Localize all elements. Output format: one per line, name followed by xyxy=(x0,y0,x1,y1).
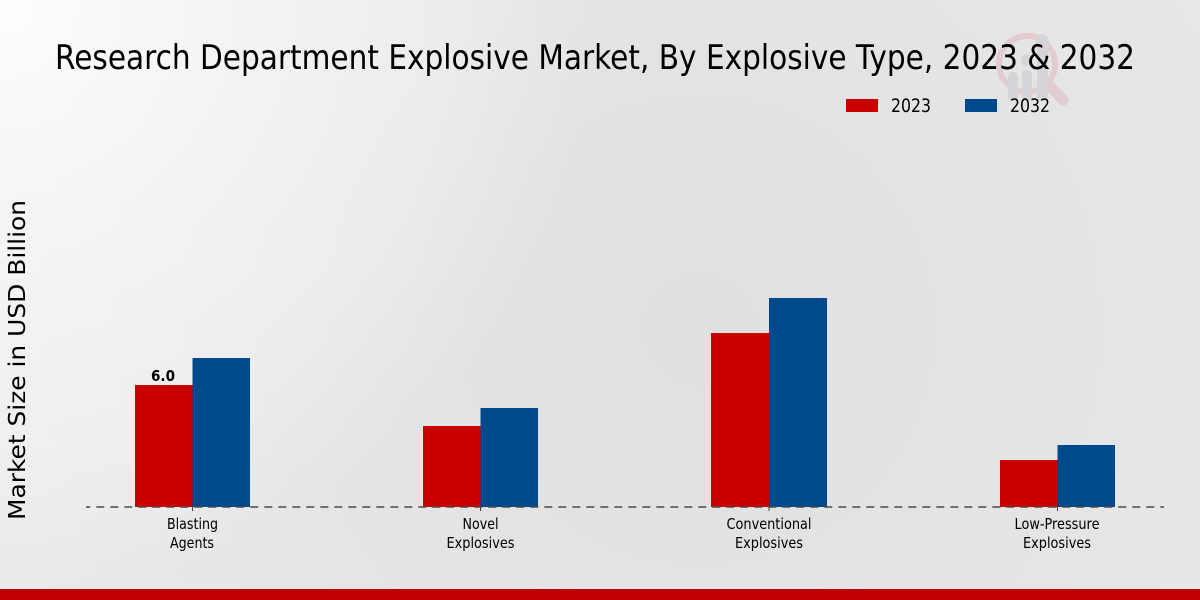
x-axis label: Conventional Explosives: Explosives xyxy=(735,534,803,552)
x-axis label: Novel Explosives: Novel xyxy=(462,515,498,533)
x-axis label: Novel Explosives: Explosives xyxy=(446,534,515,552)
bars: Low-Pressure Explosives xyxy=(1000,445,1115,507)
legend xyxy=(846,95,1050,117)
x-axis label: Blasting Agents: Agents xyxy=(170,534,214,552)
legend item: 2023 xyxy=(846,95,931,117)
x-axis label: Blasting Agents xyxy=(167,515,218,552)
legend item: 2023: 2023 xyxy=(891,95,931,117)
bar chart xyxy=(86,298,1164,511)
bars: Blasting Agents xyxy=(135,358,250,507)
x-axis label: Novel Explosives xyxy=(446,515,515,552)
y-axis label: Market Size in USD Billion xyxy=(5,200,31,520)
x-axis label: Low-Pressure Explosives xyxy=(1014,515,1100,552)
x-axis label: Low-Pressure Explosives: Explosives xyxy=(1023,534,1091,552)
bars: Conventional Explosives xyxy=(711,298,827,507)
icon: watermark magnifier with bars xyxy=(999,34,1063,101)
x-axis label: Blasting Agents: Blasting xyxy=(167,515,218,533)
x-axis label: Low-Pressure Explosives: Low-Pressure xyxy=(1014,515,1100,533)
footer bar xyxy=(0,589,1200,600)
legend item: 2032 xyxy=(965,95,1050,117)
x-axis label: Conventional Explosives: Conventional xyxy=(726,515,812,533)
value label: 6.0: 6.0 xyxy=(151,367,175,385)
x-axis label: Conventional Explosives xyxy=(726,515,812,552)
legend item: 2032: 2032 xyxy=(1010,95,1050,117)
bars: Novel Explosives xyxy=(423,408,538,507)
